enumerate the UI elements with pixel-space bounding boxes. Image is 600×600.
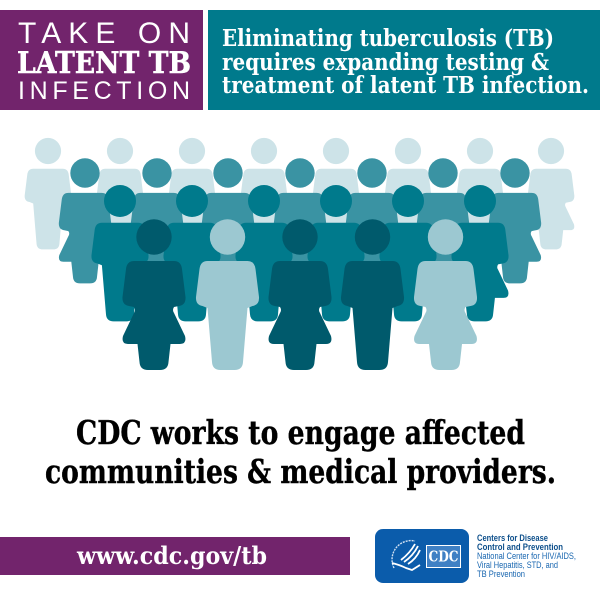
third row of people <box>91 185 509 321</box>
agency text: Control and Prevention <box>477 542 563 552</box>
agency text: Centers for Disease <box>477 533 548 543</box>
url bar: www.cdc.gov/tb <box>76 541 267 570</box>
panel: teal headline block <box>208 10 600 110</box>
headline text <box>222 25 589 99</box>
title: INFECTION: INFECTION <box>18 77 190 105</box>
CDC logo <box>375 529 469 583</box>
icon: HHS eagle <box>392 544 420 570</box>
back row of people <box>25 138 574 249</box>
crowd of people icons <box>25 138 574 370</box>
second row of people <box>59 158 541 283</box>
icon: HHS seal ring <box>392 541 415 568</box>
front row of people <box>122 219 477 370</box>
agency text <box>477 533 576 579</box>
agency text: National Center for HIV/AIDS, <box>477 551 576 561</box>
title: LATENT TB: LATENT TB <box>17 46 191 81</box>
headline text: requires expanding testing & <box>222 49 549 76</box>
title: TAKE ON: TAKE ON <box>18 17 190 50</box>
message text <box>45 413 556 491</box>
panel: purple title block <box>0 10 203 110</box>
headline text: Eliminating tuberculosis (TB) <box>222 25 554 52</box>
icon: CDC box: CDC <box>428 548 459 566</box>
agency text: TB Prevention <box>477 569 525 579</box>
url bar <box>0 537 350 575</box>
agency text: Viral Hepatitis, STD, and <box>477 560 558 570</box>
